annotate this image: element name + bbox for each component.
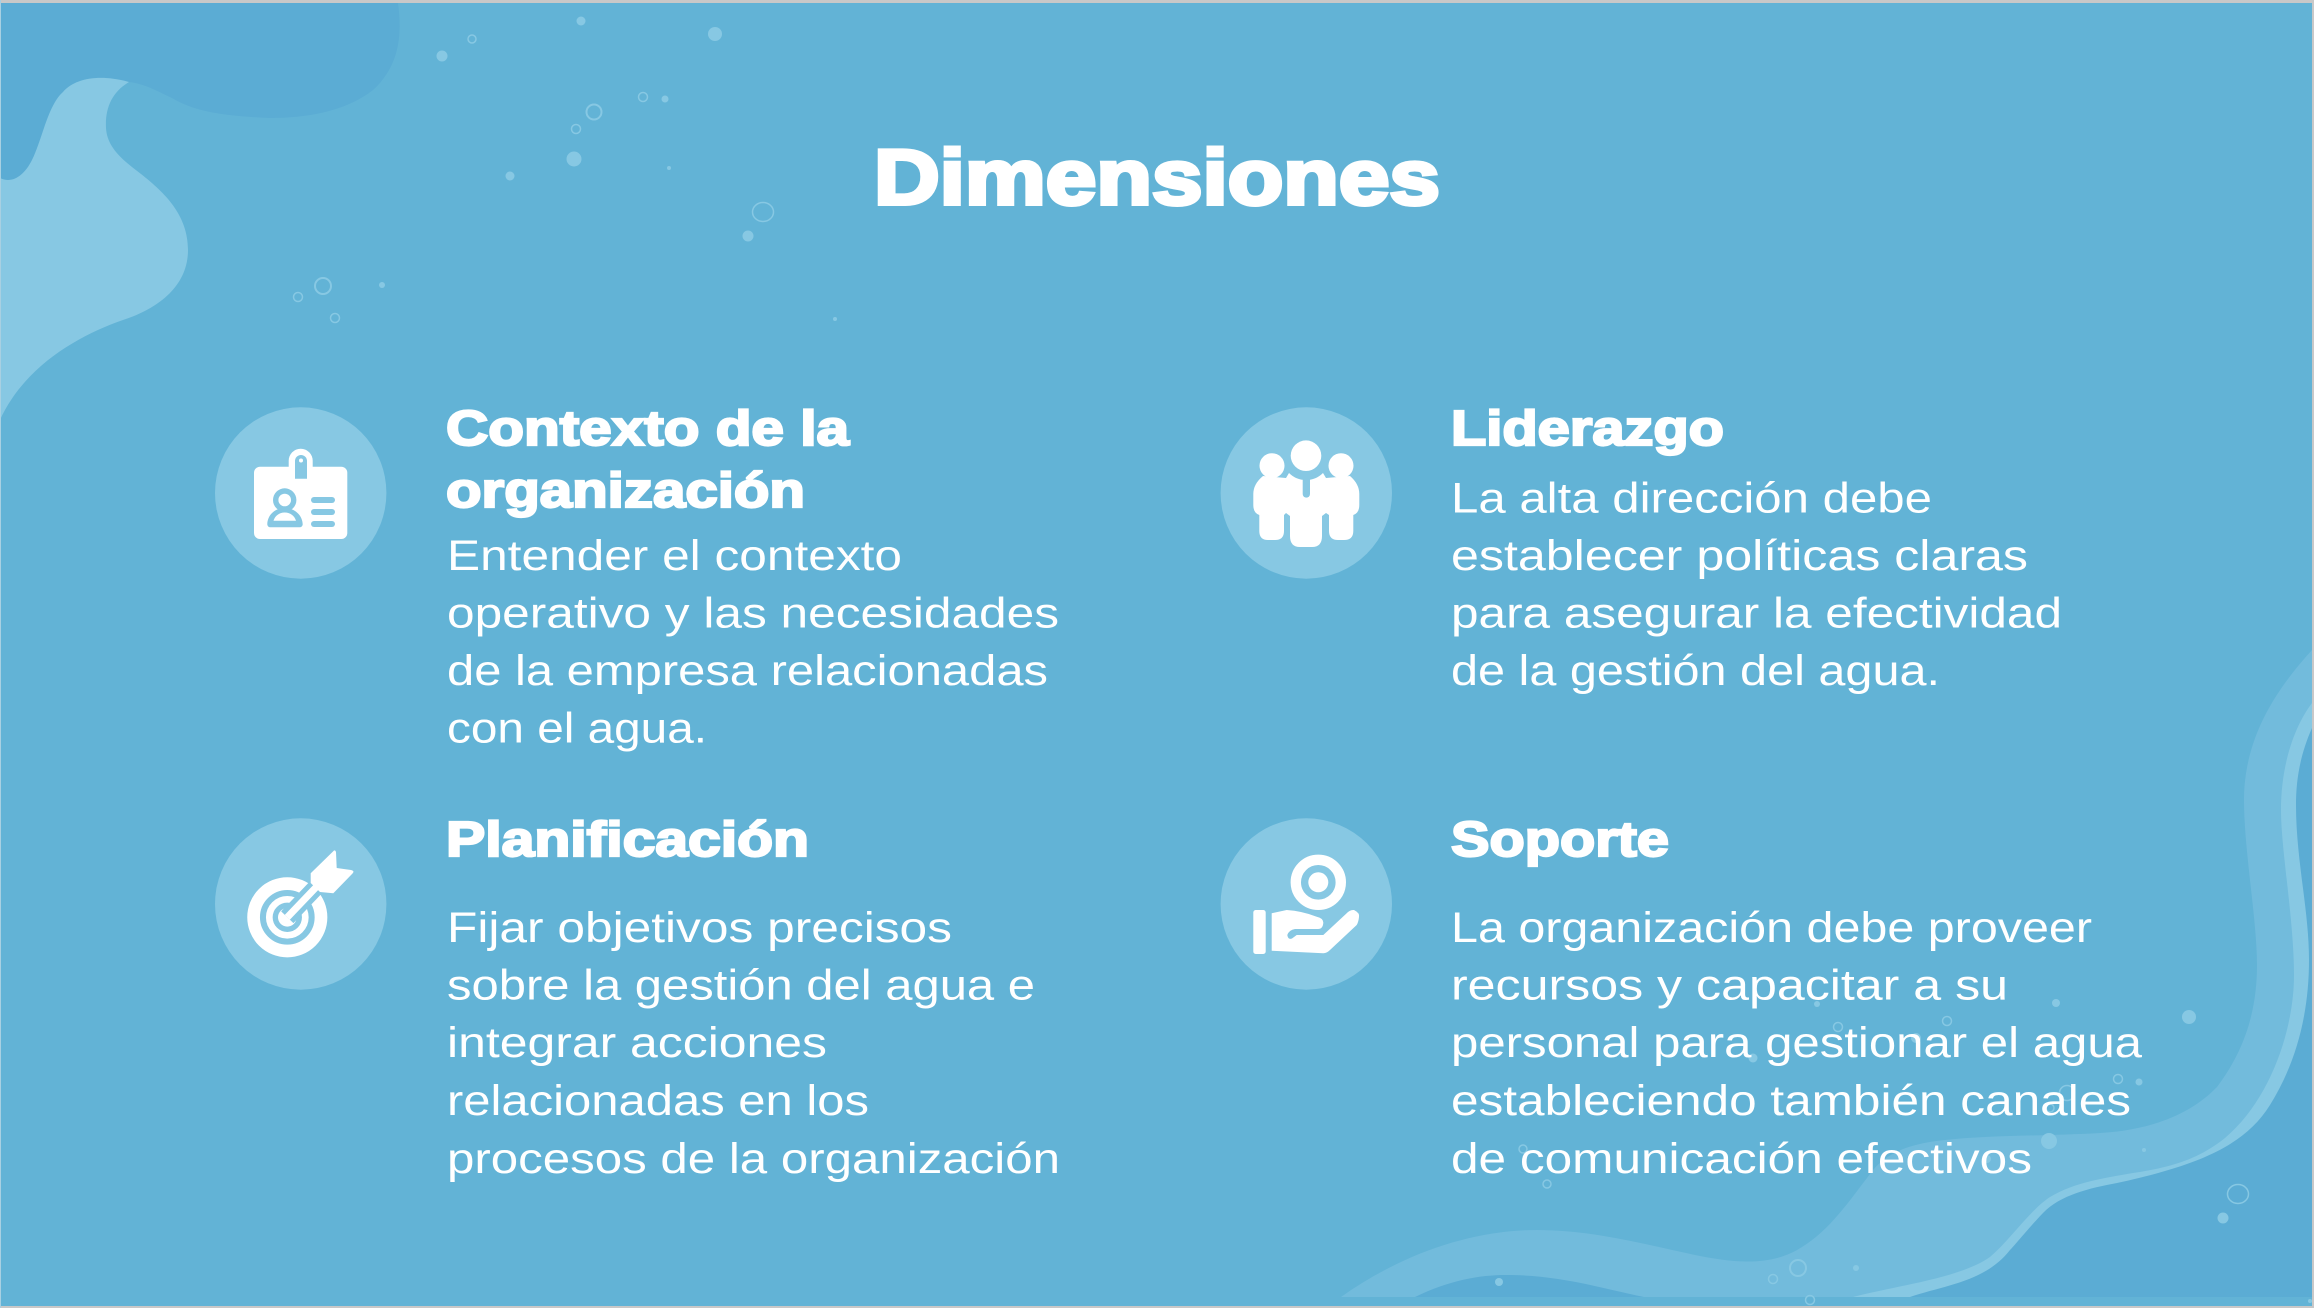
body text: de la empresa relacionadas bbox=[447, 647, 1048, 695]
body text: Entender el contexto bbox=[447, 532, 902, 580]
body text bbox=[1451, 904, 2142, 1183]
panel: contexto de la organización bbox=[215, 402, 1059, 753]
background waves: top left bbox=[0, 3, 400, 420]
body text: con el agua. bbox=[447, 705, 707, 753]
body text: integrar acciones bbox=[447, 1019, 827, 1067]
background waves: bottom right bbox=[1341, 650, 2312, 1297]
body text: para asegurar la efectividad bbox=[1451, 590, 2062, 638]
title: Dimensiones bbox=[874, 133, 1440, 221]
heading: Liderazgo bbox=[1451, 402, 1724, 456]
heading bbox=[446, 402, 850, 518]
heading: organización bbox=[446, 464, 805, 518]
body text: relacionadas en los bbox=[447, 1077, 869, 1125]
panel: planificación bbox=[215, 813, 1060, 1183]
body text: sobre la gestión del agua e bbox=[447, 962, 1035, 1010]
icon: target with arrow bbox=[215, 818, 386, 990]
body text: personal para gestionar el agua bbox=[1451, 1019, 2142, 1067]
bubbles: top left group bbox=[294, 16, 837, 322]
body text: Fijar objetivos precisos bbox=[447, 904, 952, 952]
panel: soporte bbox=[1221, 813, 2142, 1183]
panel: liderazgo bbox=[1221, 402, 2062, 695]
body text: La alta dirección debe bbox=[1451, 474, 1932, 522]
body text: establecer políticas claras bbox=[1451, 532, 2028, 580]
icon: hand holding coin bbox=[1221, 818, 1392, 990]
body text: operativo y las necesidades bbox=[447, 590, 1059, 638]
heading: Contexto de la bbox=[446, 402, 850, 456]
body text: La organización debe proveer bbox=[1451, 904, 2092, 952]
body text: procesos de la organización bbox=[447, 1135, 1060, 1183]
body text bbox=[1451, 474, 2062, 695]
body text bbox=[447, 904, 1060, 1183]
body text: de comunicación efectivos bbox=[1451, 1135, 2032, 1183]
heading: Soporte bbox=[1451, 813, 1669, 867]
heading: Planificación bbox=[446, 813, 809, 867]
icon: id badge bbox=[215, 407, 386, 579]
body text: recursos y capacitar a su bbox=[1451, 962, 2008, 1010]
body text: estableciendo también canales bbox=[1451, 1077, 2131, 1125]
body text bbox=[447, 532, 1059, 753]
bubbles: bottom right group bbox=[1495, 999, 2312, 1304]
icon: team bbox=[1221, 407, 1392, 579]
body text: de la gestión del agua. bbox=[1451, 647, 1940, 695]
